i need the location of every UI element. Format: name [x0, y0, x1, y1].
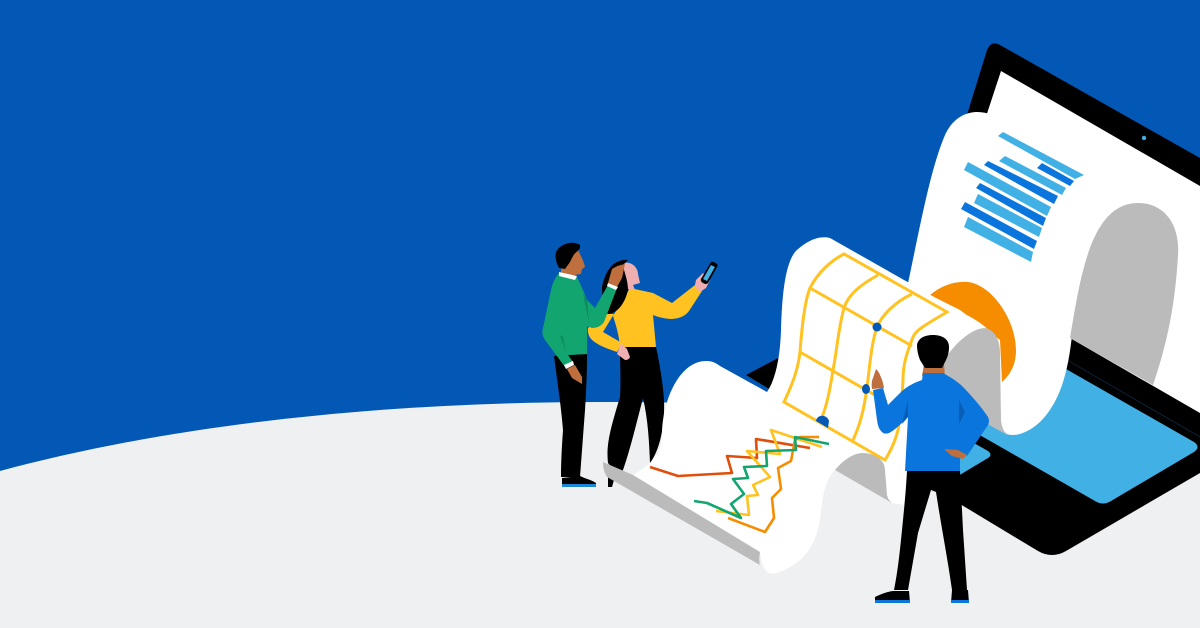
grid row 1	[810, 288, 912, 346]
green man face	[561, 250, 585, 278]
hinge line	[1067, 360, 1200, 437]
laptop screen bezel	[950, 43, 1200, 420]
blue man right sole	[951, 600, 969, 603]
blue man shirt folds	[902, 400, 965, 424]
sheet body	[633, 237, 1001, 574]
blue man pointing hand	[872, 369, 884, 389]
woman	[588, 260, 718, 487]
green man sweater folds	[560, 293, 589, 353]
red line	[650, 439, 810, 476]
green man sole	[562, 484, 596, 487]
bar 2	[1037, 163, 1074, 186]
background: light grey curved ground	[0, 402, 1200, 628]
man in blue shirt	[872, 335, 989, 603]
blue man trousers	[894, 471, 967, 590]
paper underside	[1070, 203, 1178, 385]
roll inner grey	[935, 328, 1009, 436]
trackpad	[958, 434, 990, 476]
green line	[694, 437, 829, 518]
paper roll from laptop	[900, 112, 1178, 435]
paper sheet with grid and line chart	[603, 237, 1009, 574]
blue man left shoe	[875, 591, 910, 603]
bar 9	[964, 217, 1033, 262]
bar 5	[964, 162, 1051, 216]
green man lower cuff	[564, 361, 574, 369]
man in green sweater	[542, 243, 625, 487]
green man upper cuff	[607, 283, 618, 290]
webcam	[1142, 136, 1146, 140]
grid on sheet	[784, 254, 947, 460]
grid column 1	[822, 275, 878, 417]
laptop screen	[960, 71, 1200, 413]
bar 4	[984, 161, 1058, 204]
yellow line	[716, 430, 822, 515]
green man raised hand	[608, 264, 625, 287]
orange paper backing	[930, 282, 1016, 382]
bar 3	[999, 156, 1066, 195]
grid row 2	[800, 352, 887, 402]
grid point 3	[816, 416, 829, 428]
green man lower hand	[567, 365, 582, 384]
orange line	[728, 437, 819, 532]
green man hair	[556, 243, 580, 269]
laptop base	[746, 300, 1200, 555]
grid point 2	[862, 384, 870, 394]
blue man neck	[922, 364, 945, 376]
woman sweater	[613, 285, 702, 347]
line chart	[650, 430, 829, 532]
bar 1	[998, 132, 1084, 179]
bar 6	[976, 183, 1046, 226]
blue man shirt	[873, 373, 989, 471]
blue man left sole	[875, 600, 910, 603]
blue man hair	[917, 335, 949, 368]
blue man right shoe	[951, 590, 969, 603]
bar 8	[961, 202, 1037, 249]
green man collar	[559, 272, 577, 280]
paper sheet	[900, 112, 1140, 435]
woman face	[622, 263, 640, 290]
sheet curl grey	[835, 453, 892, 503]
green man shoe	[562, 476, 596, 487]
woman hair	[602, 260, 628, 314]
keyboard panel	[950, 369, 1198, 504]
woman hand on hip	[617, 343, 630, 360]
woman raised hand	[695, 273, 710, 292]
woman trousers	[608, 347, 664, 476]
phone body	[701, 262, 718, 284]
woman shoe heel	[608, 474, 614, 487]
grid point 1	[872, 322, 882, 332]
grid outline	[784, 254, 947, 460]
bar 7	[974, 194, 1042, 237]
bar chart on paper	[961, 132, 1084, 262]
phone	[701, 262, 718, 284]
woman left arm	[588, 314, 622, 352]
laptop	[746, 43, 1200, 555]
green man trousers	[554, 354, 587, 477]
blue man hand on hip	[944, 449, 967, 459]
green man sweater	[542, 273, 617, 367]
grid column 2	[853, 294, 912, 440]
phone screen	[703, 265, 715, 281]
sheet bottom edge grey	[603, 462, 760, 565]
